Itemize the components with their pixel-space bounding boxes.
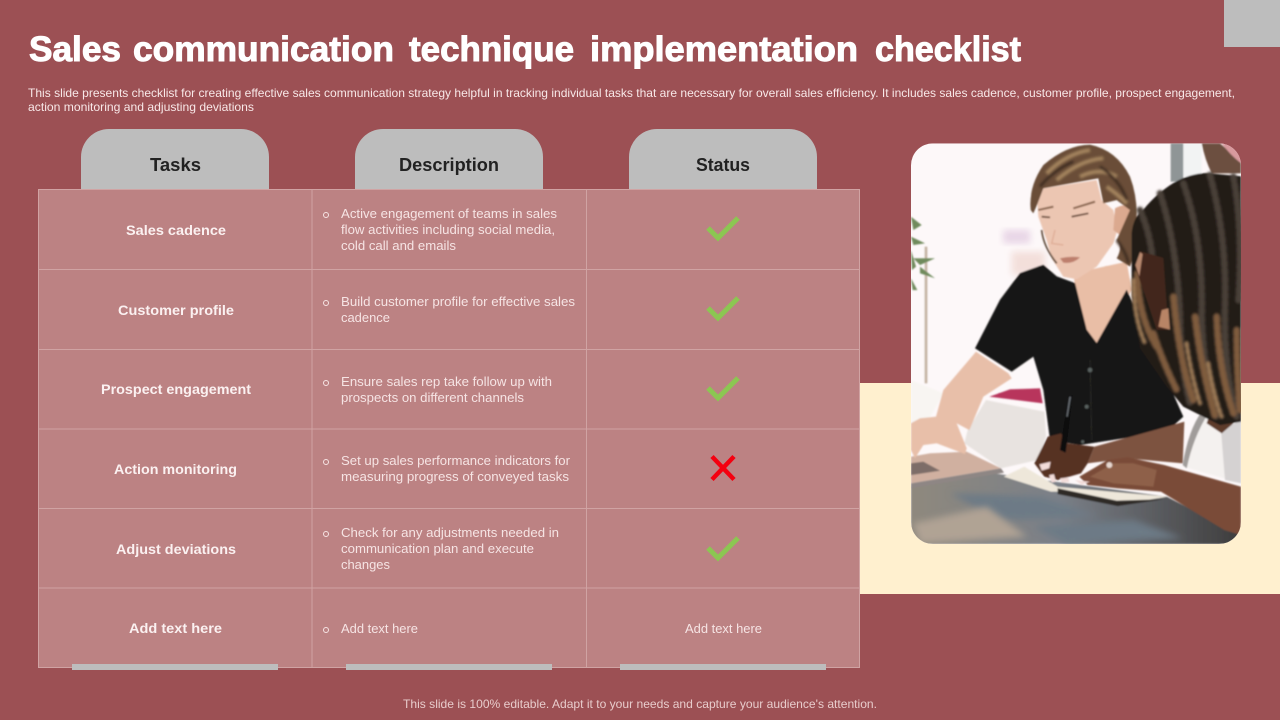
row: Add text here: Add text here — [129, 620, 222, 636]
column header: Description — [355, 129, 543, 189]
bottom bars — [72, 664, 826, 670]
row: Adjust deviations: communication plan and execute — [341, 541, 534, 556]
checklist table — [38, 129, 860, 670]
row: Add text here: Add text here — [341, 621, 418, 636]
row: Customer profile: Customer profile — [118, 302, 234, 318]
column header: Status — [629, 129, 817, 189]
column header: Tasks — [81, 129, 269, 189]
row: Add text here — [129, 620, 762, 636]
row: Sales cadence: flow activities including social media, — [341, 222, 555, 237]
row: Sales cadence: Active engagement of teams in sales — [341, 206, 558, 221]
table body — [38, 189, 860, 668]
title: technique — [409, 30, 574, 69]
footer note: This slide is 100% editable. Adapt it to your needs and capture your audience's attention. — [403, 697, 877, 711]
row: Action monitoring — [114, 453, 734, 484]
cream band — [860, 383, 1280, 594]
photo: two colleagues working at a table — [911, 143, 1241, 544]
column header: Tasks: Tasks — [150, 155, 201, 175]
row: Prospect engagement — [101, 374, 738, 405]
row: Adjust deviations: Check for any adjustments needed in — [341, 525, 559, 540]
row: Customer profile: cadence — [341, 310, 390, 325]
row: Action monitoring: Action monitoring — [114, 461, 237, 477]
row: Prospect engagement: Prospect engagement — [101, 381, 251, 397]
title — [29, 30, 1021, 69]
row: Adjust deviations: changes — [341, 557, 390, 572]
title: implementation — [590, 30, 858, 69]
row: Sales cadence — [126, 206, 738, 253]
row: Customer profile — [118, 294, 738, 325]
intro text: This slide presents checklist for creating effective sales communication strategy helpful in tracking individual tasks that are necessary for overall sales efficiency. It includes sales cadence, customer profile, prospect engagement, — [28, 86, 1235, 100]
row: Adjust deviations: Adjust deviations — [116, 541, 236, 557]
row: Action monitoring: Set up sales performance indicators for — [341, 453, 571, 468]
title: Sales — [29, 30, 121, 69]
row: Sales cadence: cold call and emails — [341, 238, 456, 253]
row: Customer profile: Build customer profile for effective sales — [341, 294, 576, 309]
row: Prospect engagement: prospects on different channels — [341, 390, 525, 405]
row: Add text here: Add text here — [685, 621, 762, 636]
column header: Status: Status — [696, 155, 750, 175]
intro text: action monitoring and adjusting deviations — [28, 100, 254, 114]
column header: Description: Description — [399, 155, 499, 175]
corner tab — [1224, 0, 1280, 47]
row: Prospect engagement: Ensure sales rep take follow up with — [341, 374, 552, 389]
row: Adjust deviations — [116, 525, 738, 572]
row: Action monitoring: measuring progress of conveyed tasks — [341, 469, 570, 484]
intro text — [28, 86, 1235, 114]
row: Sales cadence: Sales cadence — [126, 222, 226, 238]
title: checklist — [875, 30, 1021, 69]
title: communication — [133, 30, 394, 69]
